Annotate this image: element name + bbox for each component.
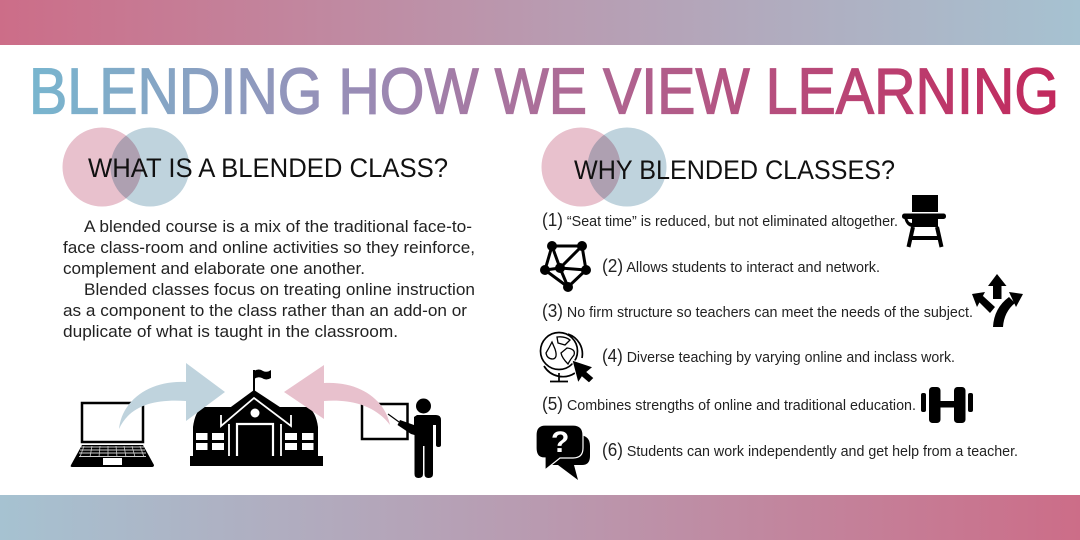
- text block: definition: Blended classes focus on treating online instruction: [84, 281, 475, 299]
- icon: question speech bubbles: ?: [551, 426, 569, 459]
- text block: definition: [63, 218, 475, 341]
- list item 4: (4) Diverse teaching by varying online and inclass work.: [602, 346, 955, 366]
- text block: definition: complement and elaborate one another.: [63, 260, 365, 278]
- top gradient band: [0, 0, 1080, 45]
- heading: what is a blended class: WHAT IS A BLENDED CLASS?: [88, 153, 448, 183]
- list item 1: (1) “Seat time” is reduced, but not eliminated altogether.: [542, 210, 898, 230]
- text block: definition: face class-room and online activities so they reinforce,: [63, 239, 475, 257]
- icon: globe with cursor: [540, 332, 594, 383]
- icon: teacher at board: [362, 398, 441, 478]
- icon: laptop: [71, 403, 154, 467]
- text block: definition: as a component to the class rather than an add-on or: [63, 302, 468, 320]
- icon: network: [540, 241, 591, 292]
- panel: what is a blended class: [62, 128, 475, 478]
- heading: why blended classes: WHY BLENDED CLASSES?: [574, 155, 895, 185]
- text block: definition: A blended course is a mix of the traditional face-to-: [84, 218, 472, 236]
- bottom gradient band: [0, 495, 1080, 540]
- arrow: online to school: [119, 363, 225, 429]
- icon: question speech bubbles: [536, 425, 590, 480]
- text block: definition: duplicate of what is taught in the classroom.: [63, 323, 398, 341]
- list item 6: (6) Students can work independently and get help from a teacher.: [602, 440, 1018, 460]
- icon: chair: [902, 195, 946, 247]
- list item 2: (2) Allows students to interact and network.: [602, 256, 880, 276]
- icon: school: [190, 370, 323, 466]
- list item 5: (5) Combines strengths of online and traditional education.: [542, 394, 916, 414]
- icon: venn circles left: [62, 128, 190, 206]
- icon: dumbbell: [921, 387, 973, 423]
- list item 3: (3) No firm structure so teachers can meet the needs of the subject.: [542, 301, 973, 321]
- icon: diverging arrows: [972, 274, 1023, 327]
- icon: venn circles right: [542, 128, 666, 206]
- panel: why blended classes: [536, 128, 1023, 480]
- arrow: teacher to school: [284, 365, 390, 425]
